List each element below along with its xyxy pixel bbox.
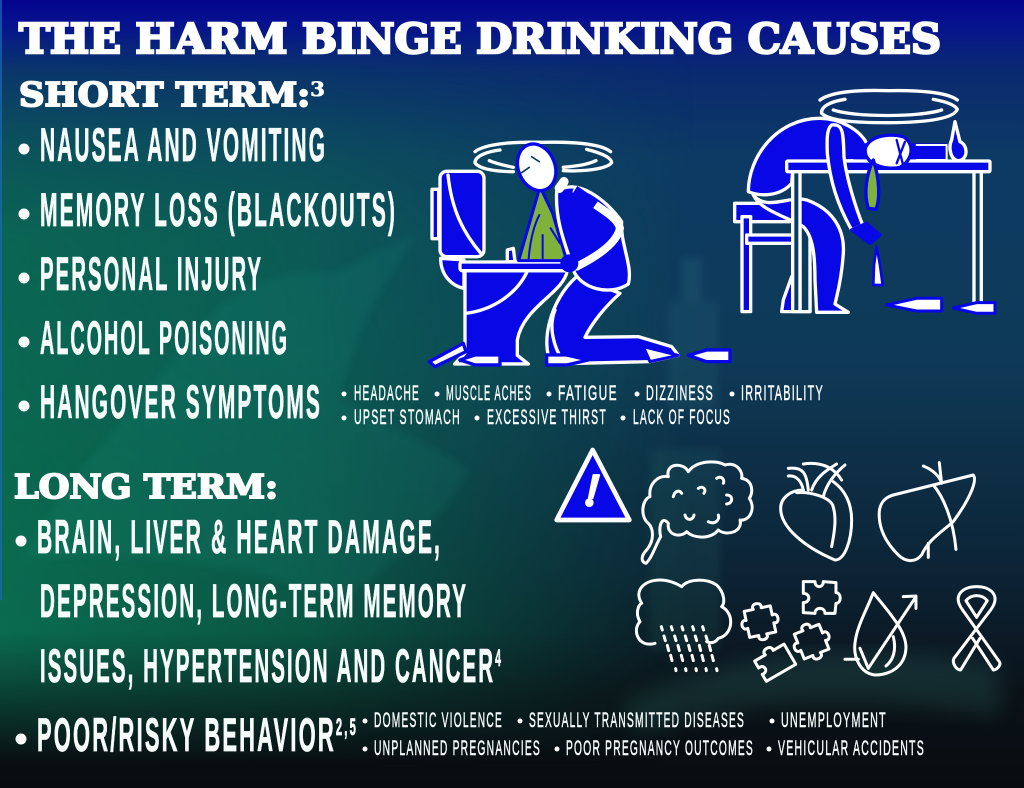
health icons — [557, 450, 1000, 681]
heading: long term: LONG TERM: — [14, 467, 278, 506]
icon: heart — [781, 463, 852, 560]
hangover symptom details — [342, 382, 824, 429]
short term list: PERSONAL INJURY — [40, 247, 263, 300]
icon: puzzle pieces — [738, 582, 840, 681]
item: nausea — [18, 118, 327, 171]
long term list: 2,5 — [336, 714, 358, 741]
item: hangover symptoms — [18, 375, 322, 428]
risky behavior details: UNEMPLOYMENT — [781, 709, 887, 732]
illustration: person vomiting into toilet — [429, 138, 730, 367]
icon: liver — [879, 463, 974, 561]
hangover symptom details: LACK OF FOCUS — [633, 406, 731, 429]
icon: blood drop and male symbol — [845, 593, 916, 675]
long term list — [16, 510, 503, 761]
item: brain, liver and heart damage — [16, 510, 503, 692]
hangover symptom details: MUSCLE ACHES — [446, 382, 532, 405]
risky behavior details: UNPLANNED PREGNANCIES — [374, 737, 541, 760]
item: alcohol poisoning — [18, 311, 289, 364]
hangover symptom details: HEADACHE — [354, 382, 420, 405]
text: 4 — [495, 645, 503, 672]
heading: short term: 3 — [310, 77, 325, 101]
risky behavior details: SEXUALLY TRANSMITTED DISEASES — [529, 709, 745, 732]
risky behavior details: DOMESTIC VIOLENCE — [374, 709, 503, 732]
text: MEMORY LOSS (BLACKOUTS) — [40, 183, 397, 236]
risky behavior details — [362, 709, 925, 760]
short term list: ALCOHOL POISONING — [40, 311, 289, 364]
item: memory loss — [18, 183, 397, 236]
short term list: HANGOVER SYMPTOMS — [40, 375, 322, 428]
illustration: person slumped at table — [735, 90, 995, 313]
hangover symptom details: FATIGUE — [558, 382, 618, 405]
icon: brain — [642, 462, 752, 563]
hangover symptom details: IRRITABILITY — [741, 382, 824, 405]
text: DEPRESSION, LONG-TERM MEMORY — [40, 574, 468, 627]
title: THE HARM BINGE DRINKING CAUSES — [19, 15, 941, 63]
risky behavior details: POOR PREGNANCY OUTCOMES — [566, 737, 754, 760]
short term list: NAUSEA AND VOMITING — [40, 118, 327, 171]
icon: depression cloud — [636, 580, 731, 644]
item: poor risky behavior — [16, 708, 358, 761]
item: brain, liver and heart damage: BRAIN, LIVER & HEART DAMAGE, — [37, 510, 442, 563]
item: poor risky behavior: POOR/RISKY BEHAVIOR — [37, 708, 678, 761]
heading: short term: SHORT TERM: — [19, 75, 292, 114]
hangover symptom details: UPSET STOMACH — [354, 406, 461, 429]
icon: rain dashes — [661, 627, 717, 671]
short term list — [18, 118, 397, 428]
item: personal injury — [18, 247, 263, 300]
icon: warning triangle — [557, 450, 629, 520]
hangover symptom details: EXCESSIVE THIRST — [487, 406, 607, 429]
hangover symptom details: DIZZINESS — [646, 382, 714, 405]
icon: awareness ribbon — [953, 587, 1000, 670]
